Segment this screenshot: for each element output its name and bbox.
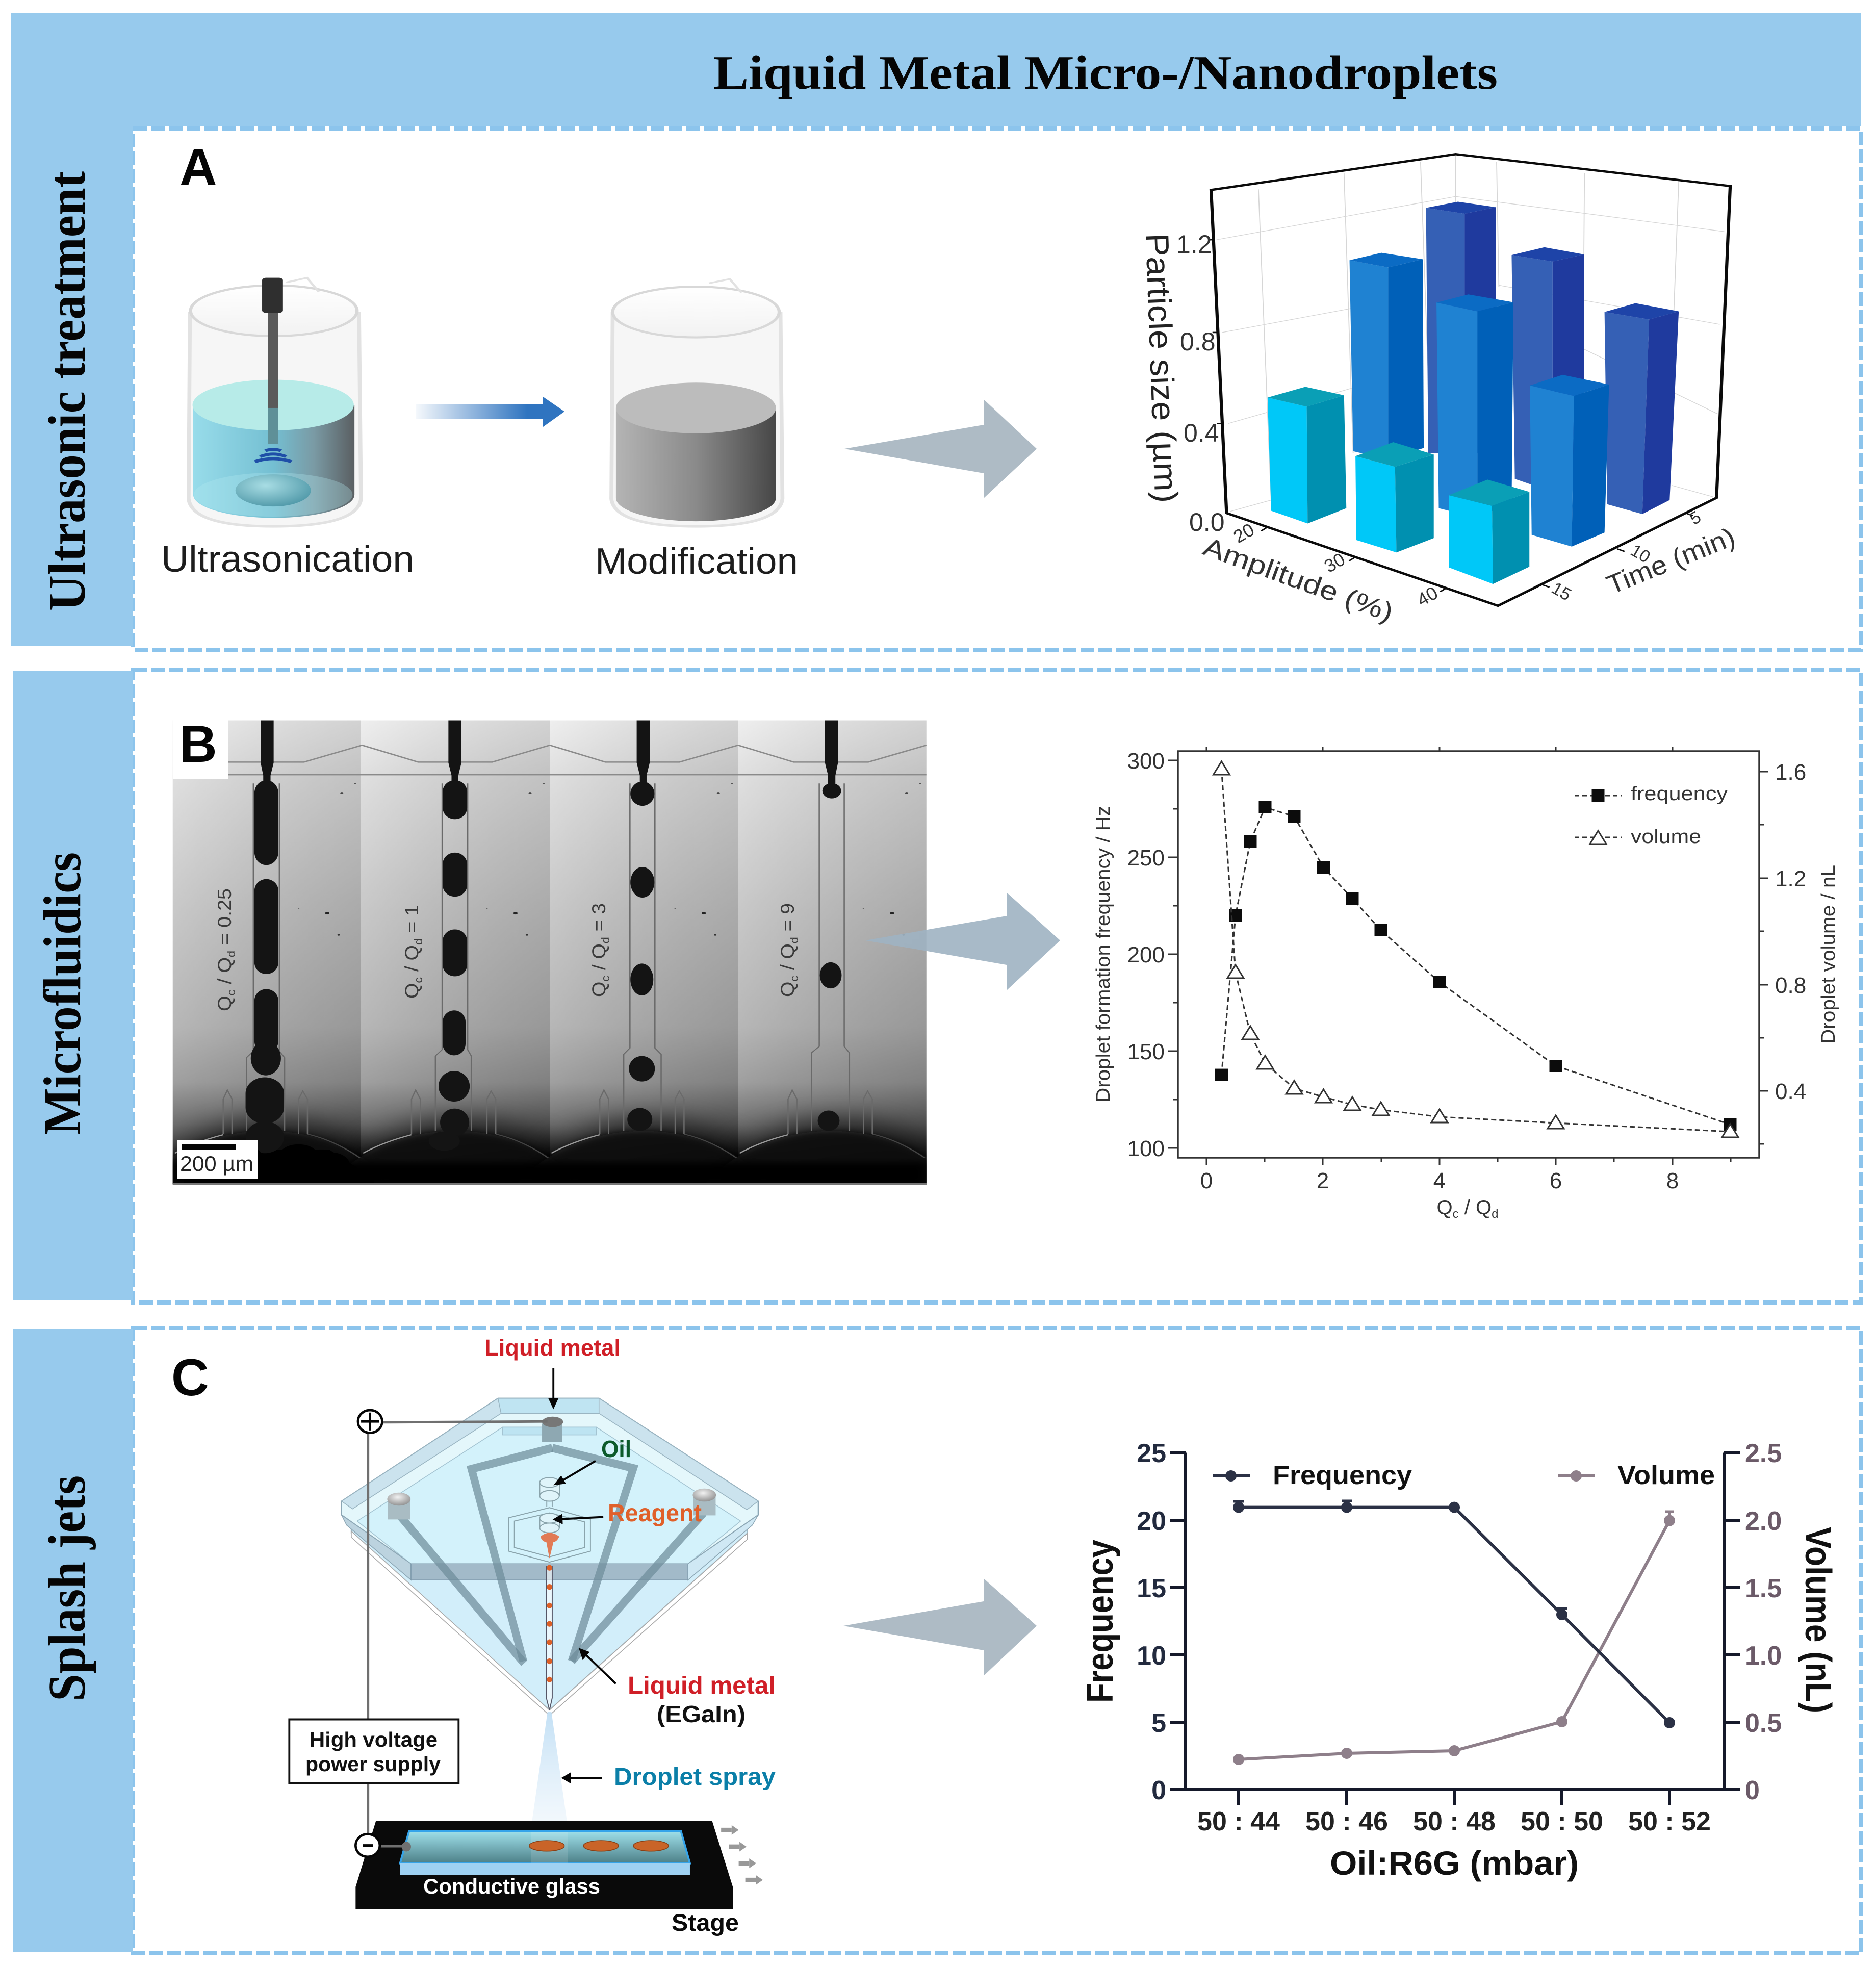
series: frequency bbox=[1215, 801, 1737, 1131]
amplitude axis labels: 20 bbox=[1230, 519, 1258, 547]
time axis labels: 15 bbox=[1548, 578, 1575, 605]
upper plate bbox=[342, 1398, 758, 1580]
left tick labels: 250 bbox=[1127, 846, 1165, 871]
legend bbox=[1213, 1461, 1715, 1490]
right tick labels: 0.4 bbox=[1775, 1079, 1806, 1104]
x axis title: d bbox=[1492, 1207, 1498, 1221]
flow ratio labels: / Q bbox=[777, 943, 798, 976]
y axis title left: Droplet formation frequency / Hz bbox=[1093, 806, 1114, 1103]
beaker: ultrasonication bbox=[189, 278, 361, 526]
x tick labels: 50 : 50 bbox=[1521, 1807, 1603, 1836]
label: oil: Oil bbox=[601, 1436, 631, 1462]
x tick labels: 50 : 48 bbox=[1413, 1807, 1496, 1836]
left tick labels: 5 bbox=[1151, 1708, 1166, 1738]
legend: Frequency bbox=[1273, 1461, 1412, 1490]
chart frame bbox=[1211, 154, 1730, 606]
channels bbox=[399, 1448, 704, 1664]
series: volume bbox=[1214, 761, 1738, 1137]
flow ratio labels: / Q bbox=[588, 943, 609, 976]
x tick labels bbox=[1197, 1807, 1711, 1836]
callout arrows bbox=[548, 1368, 616, 1783]
legend: volume bbox=[1631, 826, 1701, 848]
time axis labels: 5 bbox=[1686, 507, 1704, 529]
label: liquid metal EGaIn: Liquid metal bbox=[628, 1672, 776, 1699]
label: stage: Stage bbox=[672, 1909, 739, 1936]
right tick labels bbox=[1745, 1439, 1782, 1805]
label: high voltage power supply: High voltage bbox=[310, 1728, 438, 1751]
lower plate bbox=[351, 1427, 747, 1710]
y axis title: Particle size (µm) bbox=[1139, 233, 1185, 503]
flow ratio labels: / Q bbox=[401, 945, 422, 977]
label: droplet spray: Droplet spray bbox=[614, 1764, 776, 1791]
right tick labels: 1.2 bbox=[1775, 866, 1806, 891]
flow ratio labels: d bbox=[412, 938, 425, 945]
microfluidic chip diagram bbox=[289, 1335, 776, 1936]
x axis title: Q bbox=[1437, 1196, 1453, 1219]
left tick labels: 15 bbox=[1137, 1574, 1166, 1603]
left tick labels: 100 bbox=[1127, 1136, 1165, 1161]
stage with conductive glass bbox=[355, 1821, 763, 1909]
panel letter C: C bbox=[171, 1348, 209, 1407]
flow ratio labels: c bbox=[225, 990, 238, 995]
y axis tick labels: 0.8 bbox=[1180, 327, 1216, 356]
series: frequency bbox=[1233, 1501, 1675, 1728]
wells bbox=[387, 1417, 716, 1519]
arrow: blue process arrow bbox=[416, 397, 564, 427]
flow ratio labels: c bbox=[599, 976, 612, 982]
panel letter B: B bbox=[179, 715, 217, 773]
flow ratio labels: = 0.25 bbox=[214, 888, 235, 951]
time axis labels: 10 bbox=[1627, 541, 1654, 567]
arrow: grey to chart A bbox=[844, 399, 1037, 498]
line chart: frequency and volume vs oil:R6G pressure bbox=[1080, 1439, 1838, 1882]
x tick labels: 8 bbox=[1666, 1168, 1679, 1193]
x axis title: / Q bbox=[1459, 1196, 1492, 1219]
flow ratio labels: Q bbox=[777, 982, 798, 997]
arrow: grey to chart B bbox=[865, 892, 1060, 990]
flow ratio labels: = 1 bbox=[401, 905, 422, 938]
right tick labels bbox=[1775, 760, 1806, 1104]
flow ratio labels: Q bbox=[401, 984, 422, 999]
reagent droplets bbox=[541, 1533, 559, 1710]
x tick labels: 50 : 44 bbox=[1197, 1807, 1280, 1836]
left tick labels: 0 bbox=[1151, 1776, 1166, 1805]
y axis title left: Frequency bbox=[1080, 1540, 1121, 1703]
flow ratio labels: Q bbox=[588, 982, 609, 997]
left tick labels: 20 bbox=[1137, 1507, 1166, 1536]
panel letter A: A bbox=[179, 138, 217, 196]
flow ratio labels: d bbox=[225, 951, 238, 957]
left tick labels: 10 bbox=[1137, 1641, 1166, 1671]
arrow: grey to chart C bbox=[843, 1578, 1037, 1676]
strip label: microfluidics: Microfluidics bbox=[33, 852, 92, 1135]
strip label: ultrasonic treatment: Ultrasonic treatment bbox=[38, 171, 96, 611]
scale bar: 200 µm bbox=[180, 1152, 253, 1176]
left tick labels: 200 bbox=[1127, 942, 1165, 967]
flow ratio labels: = 9 bbox=[777, 903, 798, 937]
legend bbox=[1575, 783, 1728, 848]
x tick labels: 0 bbox=[1200, 1168, 1213, 1193]
left tick labels: 300 bbox=[1127, 749, 1165, 774]
flow ratio labels: c bbox=[412, 977, 425, 983]
bars: middle row bbox=[1350, 253, 1609, 547]
power supply box outline bbox=[289, 1719, 458, 1783]
label: modification: Modification bbox=[595, 541, 798, 582]
header band bbox=[11, 13, 1861, 126]
strip label: splash jets: Splash jets bbox=[38, 1475, 96, 1701]
right tick labels: 0 bbox=[1745, 1776, 1760, 1805]
right tick labels: 1.0 bbox=[1745, 1641, 1782, 1671]
x axis title: c bbox=[1453, 1207, 1459, 1221]
flow ratio labels: = 3 bbox=[588, 903, 609, 937]
3D bar chart: particle size bbox=[1139, 154, 1739, 628]
beaker: modification bbox=[611, 279, 782, 526]
y axis title right: Volume (nL) bbox=[1797, 1527, 1838, 1713]
time axis labels bbox=[1548, 507, 1739, 605]
series: volume bbox=[1233, 1512, 1675, 1765]
scale bar bbox=[177, 1140, 258, 1179]
row strip: ultrasonic treatment bbox=[11, 126, 133, 646]
legend: Volume bbox=[1617, 1461, 1715, 1490]
right tick labels: 0.5 bbox=[1745, 1708, 1782, 1738]
flow ratio labels: d bbox=[599, 937, 612, 943]
row strip: splash jets bbox=[13, 1329, 133, 1952]
legend: frequency bbox=[1631, 783, 1728, 805]
y axis title right: Droplet volume / nL bbox=[1818, 865, 1839, 1044]
x tick labels: 2 bbox=[1317, 1168, 1329, 1193]
panel B: microfluidics bbox=[131, 668, 1863, 1305]
label: reagent: Reagent bbox=[608, 1500, 702, 1527]
x tick labels: 50 : 52 bbox=[1628, 1807, 1711, 1836]
bars: front row bbox=[1268, 387, 1529, 584]
amplitude axis labels: Amplitude (%) bbox=[1199, 532, 1397, 628]
left tick labels: 150 bbox=[1127, 1039, 1165, 1064]
right tick labels: 2.5 bbox=[1745, 1439, 1782, 1468]
title: Liquid Metal Micro-/Nanodroplets bbox=[713, 46, 1498, 99]
right tick labels: 0.8 bbox=[1775, 973, 1806, 998]
row strip: microfluidics bbox=[13, 671, 133, 1300]
y axis tick labels: 0.0 bbox=[1189, 508, 1225, 537]
label: EGaIn: (EGaIn) bbox=[657, 1701, 746, 1727]
label: liquid metal inlet: Liquid metal bbox=[484, 1335, 621, 1361]
time axis labels: Time (min) bbox=[1603, 522, 1739, 600]
left tick labels bbox=[1137, 1439, 1166, 1805]
x tick labels: 50 : 46 bbox=[1305, 1807, 1388, 1836]
flow ratio labels: c bbox=[788, 976, 801, 982]
y axis tick labels: 0.4 bbox=[1184, 419, 1219, 447]
y axis tick labels: 1.2 bbox=[1176, 230, 1212, 259]
right tick labels: 2.0 bbox=[1745, 1507, 1782, 1536]
white corner behind letter bbox=[173, 720, 228, 779]
y axis tick labels bbox=[1176, 230, 1225, 537]
label: high voltage power supply: power supply bbox=[305, 1752, 441, 1776]
amplitude axis labels: 30 bbox=[1321, 548, 1349, 577]
panel A: ultrasonic treatment bbox=[133, 129, 1861, 650]
flow ratio labels: / Q bbox=[214, 957, 235, 990]
right tick labels: 1.6 bbox=[1775, 760, 1806, 785]
line chart: droplet frequency and volume vs flow ratio bbox=[1093, 747, 1839, 1221]
flow ratio labels bbox=[214, 888, 801, 1011]
label: conductive glass: Conductive glass bbox=[423, 1874, 600, 1898]
flow ratio labels: d bbox=[788, 937, 801, 943]
droplet spray bbox=[532, 1712, 567, 1822]
left tick labels: 25 bbox=[1137, 1439, 1166, 1468]
amplitude axis labels bbox=[1199, 519, 1442, 628]
flow ratio labels: Q bbox=[214, 997, 235, 1011]
label: high voltage power supply bbox=[305, 1728, 441, 1776]
label: ultrasonication: Ultrasonication bbox=[161, 539, 414, 580]
x tick labels: 4 bbox=[1433, 1168, 1446, 1193]
bars: back row bbox=[1426, 201, 1679, 514]
left tick labels bbox=[1127, 749, 1165, 1161]
x axis title: Oil:R6G (mbar) bbox=[1330, 1844, 1579, 1882]
micrograph: droplet formation at four flow ratios bbox=[172, 720, 927, 1185]
amplitude axis labels: 40 bbox=[1414, 582, 1442, 610]
right tick labels: 1.5 bbox=[1745, 1574, 1782, 1603]
x tick labels bbox=[1200, 1168, 1679, 1193]
center reservoirs bbox=[508, 1477, 590, 1562]
wires and electrodes bbox=[355, 1410, 548, 1857]
x tick labels: 6 bbox=[1550, 1168, 1562, 1193]
